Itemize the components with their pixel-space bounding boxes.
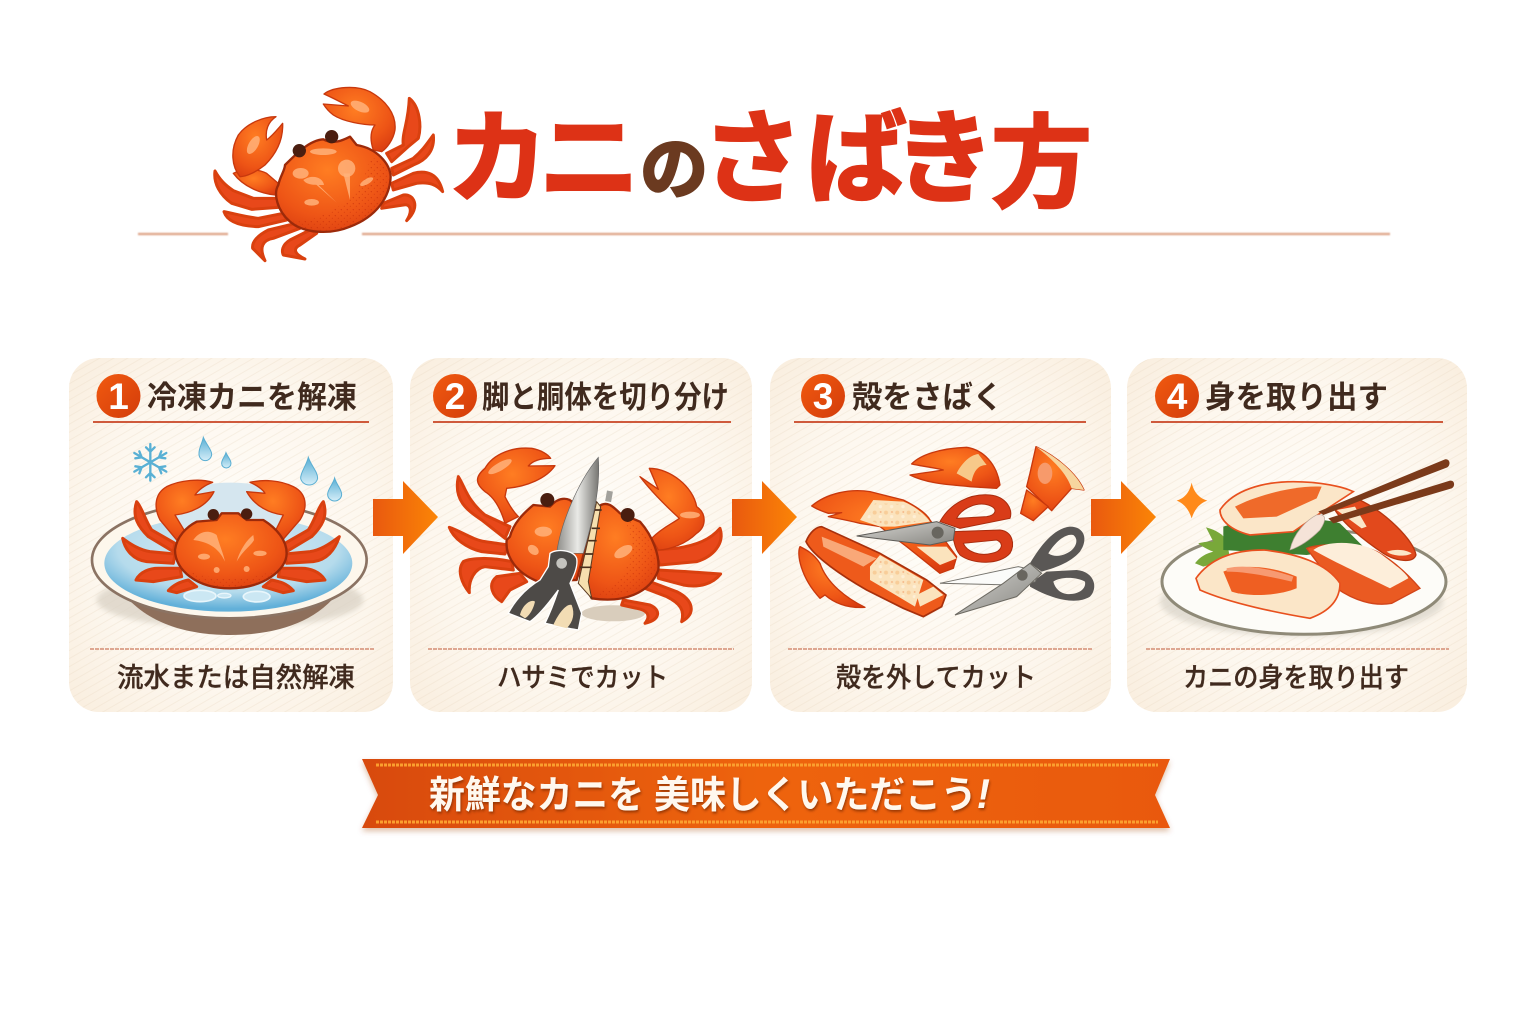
illustration: crab on plate — [92, 437, 367, 635]
icon: sparkle — [1177, 483, 1207, 518]
card background — [770, 358, 1111, 712]
illustration: crab meat on plate — [1160, 459, 1454, 637]
title: き — [894, 104, 995, 216]
panel: step 4 meat — [1127, 358, 1467, 712]
banner text: 新鮮なカニを 美味しくいただこう! — [429, 770, 990, 817]
title: ば — [806, 104, 907, 216]
icon: chopsticks — [1318, 459, 1454, 523]
card background — [69, 358, 393, 712]
icon: grey scissors — [940, 527, 1094, 615]
title: ニ — [539, 104, 640, 216]
icon: red scissors — [857, 495, 1013, 562]
title: 方 — [991, 109, 1092, 221]
title rule — [138, 233, 1390, 235]
step caption: 流水または自然解凍 — [117, 663, 355, 693]
step caption: ハサミでカット — [497, 663, 668, 693]
title: さ — [702, 104, 803, 216]
step number 2: 2 — [445, 376, 465, 417]
panel: step 3 shell — [770, 358, 1111, 712]
panel: step 1 thaw — [69, 358, 393, 712]
icon: header crab — [215, 87, 443, 261]
arrow 2 to 3 — [732, 481, 797, 554]
step number 2 — [433, 374, 477, 418]
illustration: crab and scissors — [449, 448, 721, 630]
card background — [410, 358, 752, 712]
step number 4: 4 — [1167, 376, 1188, 417]
step number 4 — [1155, 374, 1199, 418]
step number 3: 3 — [813, 376, 833, 417]
title: の — [640, 132, 708, 208]
arrow 1 to 2 — [373, 481, 438, 554]
step caption: 殻を外してカット — [836, 663, 1036, 693]
step caption: カニの身を取り出す — [1183, 663, 1409, 693]
icon: water drops — [199, 437, 342, 501]
icon: snowflake — [134, 444, 166, 481]
step number 3 — [801, 374, 845, 418]
icon: kitchen scissors — [508, 457, 599, 630]
arrow 3 to 4 — [1091, 481, 1156, 554]
banner — [362, 759, 1170, 828]
step heading: 脚と胴体を切り分け — [482, 380, 729, 415]
step heading: 身を取り出す — [1205, 380, 1388, 415]
illustration: shells and scissors — [799, 447, 1094, 617]
step heading: 殻をさばく — [852, 380, 1003, 415]
card background — [1127, 358, 1467, 712]
step number 1 — [96, 374, 140, 418]
panel: step 2 cut — [410, 358, 752, 712]
step heading: 冷凍カニを解凍 — [147, 380, 357, 415]
step number 1: 1 — [108, 376, 129, 417]
title: カ — [447, 104, 548, 216]
